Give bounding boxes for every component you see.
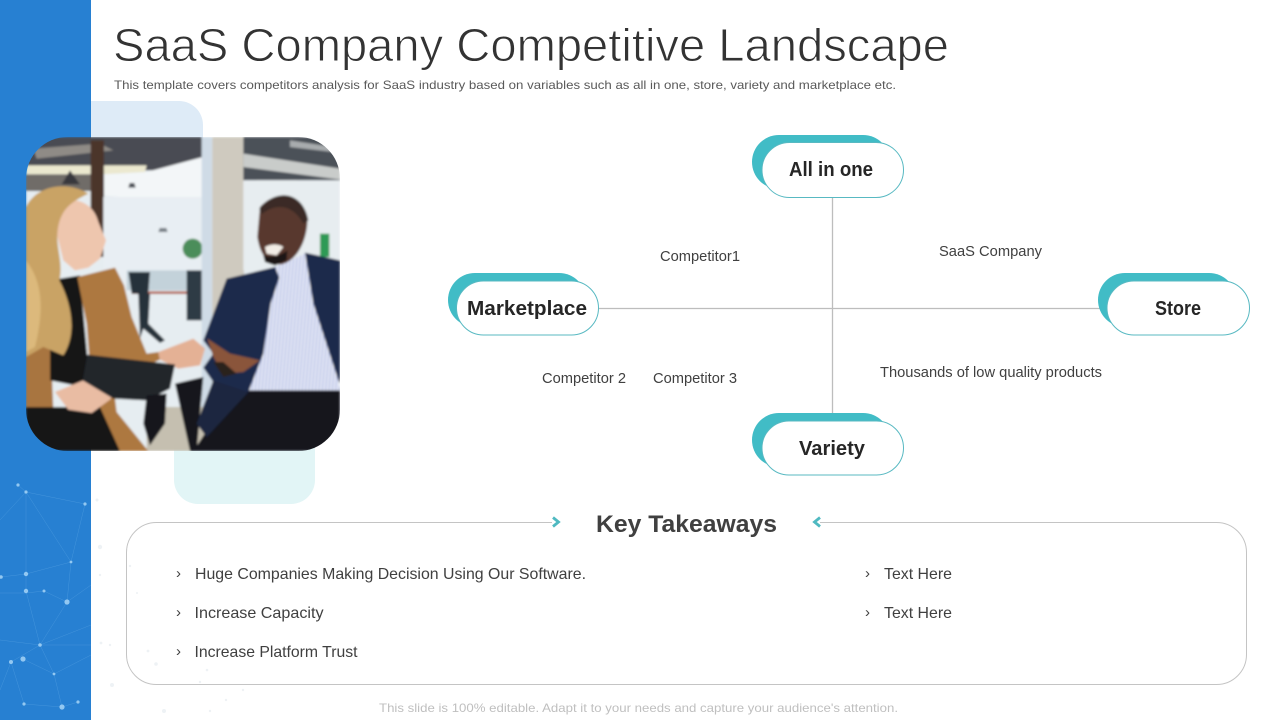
title: SaaS Company Competitive Landscape <box>113 19 949 71</box>
subtitle: This template covers competitors analysis for SaaS industry based on variables such as all in one, store, variety and marketplace etc. <box>114 78 896 92</box>
axis pill: Marketplace <box>448 273 598 335</box>
arrow: right chevron pointing left <box>814 518 820 526</box>
axis pill: All in one: All in one <box>789 159 873 181</box>
takeaway 4: Text Here <box>884 566 952 583</box>
takeaway 2: Increase Capacity <box>194 605 324 622</box>
label: Thousands of low quality products: Thousands of low quality products <box>880 365 1102 381</box>
axis pill: Marketplace: Marketplace <box>467 298 587 320</box>
axis pill: All in one <box>752 135 904 198</box>
label: SaaS Company: SaaS Company <box>939 244 1043 260</box>
photo: two colleagues in an office <box>26 137 340 451</box>
decorative block: light teal <box>174 420 315 504</box>
label: Competitor 3: Competitor 3 <box>653 371 737 387</box>
photo figure: man <box>193 195 340 451</box>
label: Competitor 2: Competitor 2 <box>542 371 626 387</box>
photo background: office window <box>26 137 340 451</box>
takeaway 1: › <box>176 565 181 582</box>
panel: key takeaways <box>126 511 1246 684</box>
sidebar: blue band with network pattern <box>0 0 91 720</box>
takeaway 3: Increase Platform Trust <box>194 644 358 661</box>
photo element: tablet <box>83 355 175 400</box>
vertical axis line <box>832 198 834 421</box>
axis pill: Variety <box>752 413 904 475</box>
takeaway 5: Text Here <box>884 605 952 622</box>
takeaway 3: › <box>176 643 181 660</box>
horizontal axis line <box>599 308 1107 310</box>
takeaway 2: › <box>176 604 181 621</box>
takeaway 1: Huge Companies Making Decision Using Our Software. <box>195 566 586 583</box>
faint network dots on white <box>96 498 244 713</box>
axis pill: Store: Store <box>1155 298 1201 320</box>
footer note: This slide is 100% editable. Adapt it to your needs and capture your audience's attention. <box>379 701 898 715</box>
axis pill: Store <box>1098 273 1250 335</box>
decorative block: light blue <box>91 101 203 150</box>
takeaway 5: › <box>865 604 870 621</box>
arrow: left chevron pointing right <box>553 518 558 526</box>
panel outline <box>126 522 1246 684</box>
label: Competitor1: Competitor1 <box>660 249 740 265</box>
heading: Key Takeaways: Key Takeaways <box>596 511 777 538</box>
photo figure: woman <box>26 186 205 451</box>
takeaway 4: › <box>865 565 870 582</box>
axis pill: Variety: Variety <box>799 438 866 460</box>
photo element: chairs <box>143 377 203 451</box>
